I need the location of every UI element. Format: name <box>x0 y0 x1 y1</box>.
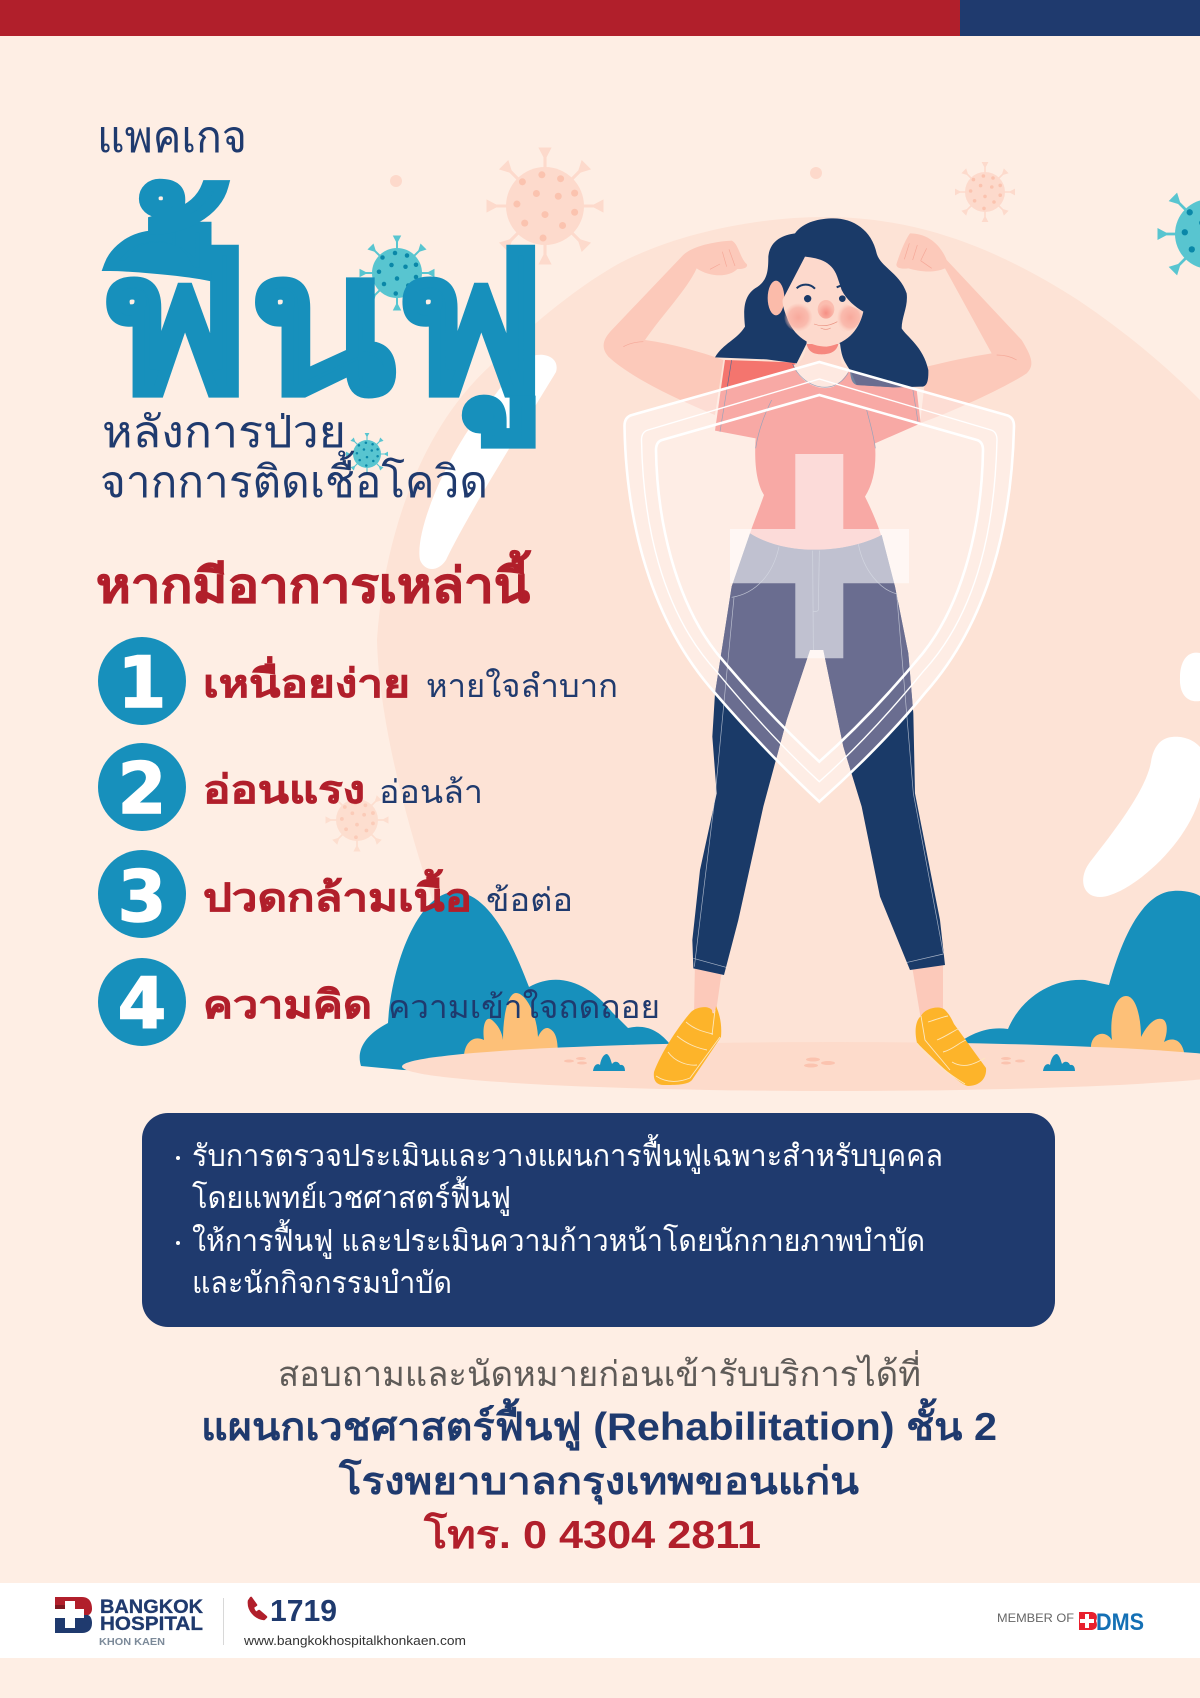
symptom 4: ความคิด <box>203 984 372 1027</box>
panel text: โดยแพทย์เวชศาสตร์ฟื้นฟู <box>192 1176 511 1216</box>
hills right <box>955 891 1200 1075</box>
arm right <box>896 233 1031 423</box>
hospital logo: BANGKOK <box>100 1597 203 1618</box>
top colour bar <box>0 0 1200 36</box>
nose <box>818 300 834 319</box>
symptom 2 <box>98 743 483 831</box>
collar line <box>793 364 848 387</box>
symptom 3 <box>98 850 573 938</box>
jeans and hair tinted through shield <box>692 360 945 975</box>
virus: top right pink <box>955 162 1015 222</box>
orange plant left <box>464 993 558 1060</box>
neck <box>793 340 846 388</box>
subtitle: จากการติดเชื้อโควิด <box>100 450 488 507</box>
panel bullets <box>176 1156 180 1245</box>
symptom 2: 2 <box>118 748 166 830</box>
top / torso <box>715 360 921 557</box>
orange plant right <box>1091 996 1185 1060</box>
symptom 3: ข้อต่อ <box>486 882 573 918</box>
website: www.bangkokhospitalkhonkaen.com <box>243 1633 466 1648</box>
panel text: รับการตรวจประเมินและวางแผนการฟื้นฟูเฉพาะสำหรับบุคคล <box>192 1134 943 1175</box>
virus: large pink <box>486 148 604 264</box>
jeans <box>692 533 945 975</box>
face <box>783 257 863 347</box>
shoe right <box>916 1008 986 1086</box>
symptom 1 <box>98 637 618 725</box>
subtitle: หลังการป่วย <box>102 408 346 457</box>
shield outlines <box>624 362 1014 802</box>
hills left <box>360 892 669 1075</box>
virus: small teal <box>346 433 388 475</box>
panel text: และนักกิจกรรมบำบัด <box>192 1267 452 1300</box>
small bushes <box>593 1054 1075 1071</box>
symptom 3: 3 <box>118 856 166 938</box>
hospital logo: KHON KAEN <box>99 1636 165 1648</box>
ground ellipse <box>402 1042 1200 1091</box>
member of BDMS: MEMBER OF <box>997 1611 1074 1625</box>
upper body <box>604 218 1031 557</box>
symptom 4: ความเข้าใจถดถอย <box>388 989 660 1025</box>
hotline: 1719 <box>270 1593 337 1628</box>
panel text: ให้การฟื้นฟู และประเมินความก้าวหน้าโดยนักกายภาพบำบัด <box>192 1219 925 1259</box>
symptom 1: 1 <box>118 642 166 724</box>
illustration: woman with shield <box>604 218 1031 1086</box>
symptom 4: 4 <box>118 963 166 1045</box>
virus: faint pink lower <box>326 788 388 852</box>
jeans seams <box>693 544 943 967</box>
cheeks <box>784 303 812 331</box>
hospital logo: HOSPITAL <box>100 1614 203 1635</box>
panel: services <box>142 1113 1055 1327</box>
cross <box>730 454 909 658</box>
title: ฟื้นฟู: ฟื้นฟู <box>99 181 546 447</box>
footer band <box>0 1583 1200 1658</box>
legs skin <box>694 960 943 1020</box>
decorative dots <box>390 167 822 187</box>
member of BDMS: DMS <box>1096 1609 1144 1636</box>
background peach blob <box>377 217 1200 1075</box>
top seam lines <box>720 360 918 448</box>
white swoosh left <box>419 355 557 569</box>
symptom 1: เหนื่อยง่าย <box>203 656 410 706</box>
contact hospital: โรงพยาบาลกรุงเทพขอนแก่น <box>338 1458 859 1505</box>
fist lines <box>623 243 1017 360</box>
phone icon <box>249 1598 266 1619</box>
symptom 3: ปวดกล้ามเนื้อ <box>203 869 472 920</box>
symptom 2: อ่อนแรง <box>203 769 365 812</box>
white swooshes right <box>1083 653 1200 897</box>
title: แพคเกจ: แพคเกจ <box>97 113 247 162</box>
virus: teal right edge <box>1158 182 1200 286</box>
contact phone: โทร. 0 4304 2811 <box>423 1512 761 1557</box>
shoe left <box>654 1006 721 1085</box>
shield fill <box>624 362 1014 802</box>
heading: symptoms: หากมีอาการเหล่านี้ <box>96 550 531 613</box>
hair <box>715 218 928 387</box>
subtitle <box>100 408 488 507</box>
arm left <box>604 241 747 415</box>
member of BDMS <box>997 1609 1144 1636</box>
contact department: แผนกเวชศาสตร์ฟื้นฟู (Rehabilitation) ชั้น 2 <box>201 1398 997 1451</box>
ground pebbles <box>564 1057 1025 1068</box>
eyes and brows <box>804 295 811 302</box>
contact intro: สอบถามและนัดหมายก่อนเข้ารับบริการได้ที่ <box>278 1350 921 1394</box>
mouth <box>814 322 837 329</box>
symptom 2: อ่อนล้า <box>379 774 483 810</box>
symptom 1: หายใจลำบาก <box>426 668 618 704</box>
panel text <box>192 1134 943 1300</box>
symptom 4 <box>98 958 660 1046</box>
virus: teal centre <box>360 236 434 310</box>
ear <box>768 281 784 315</box>
hospital logo <box>55 1597 203 1648</box>
